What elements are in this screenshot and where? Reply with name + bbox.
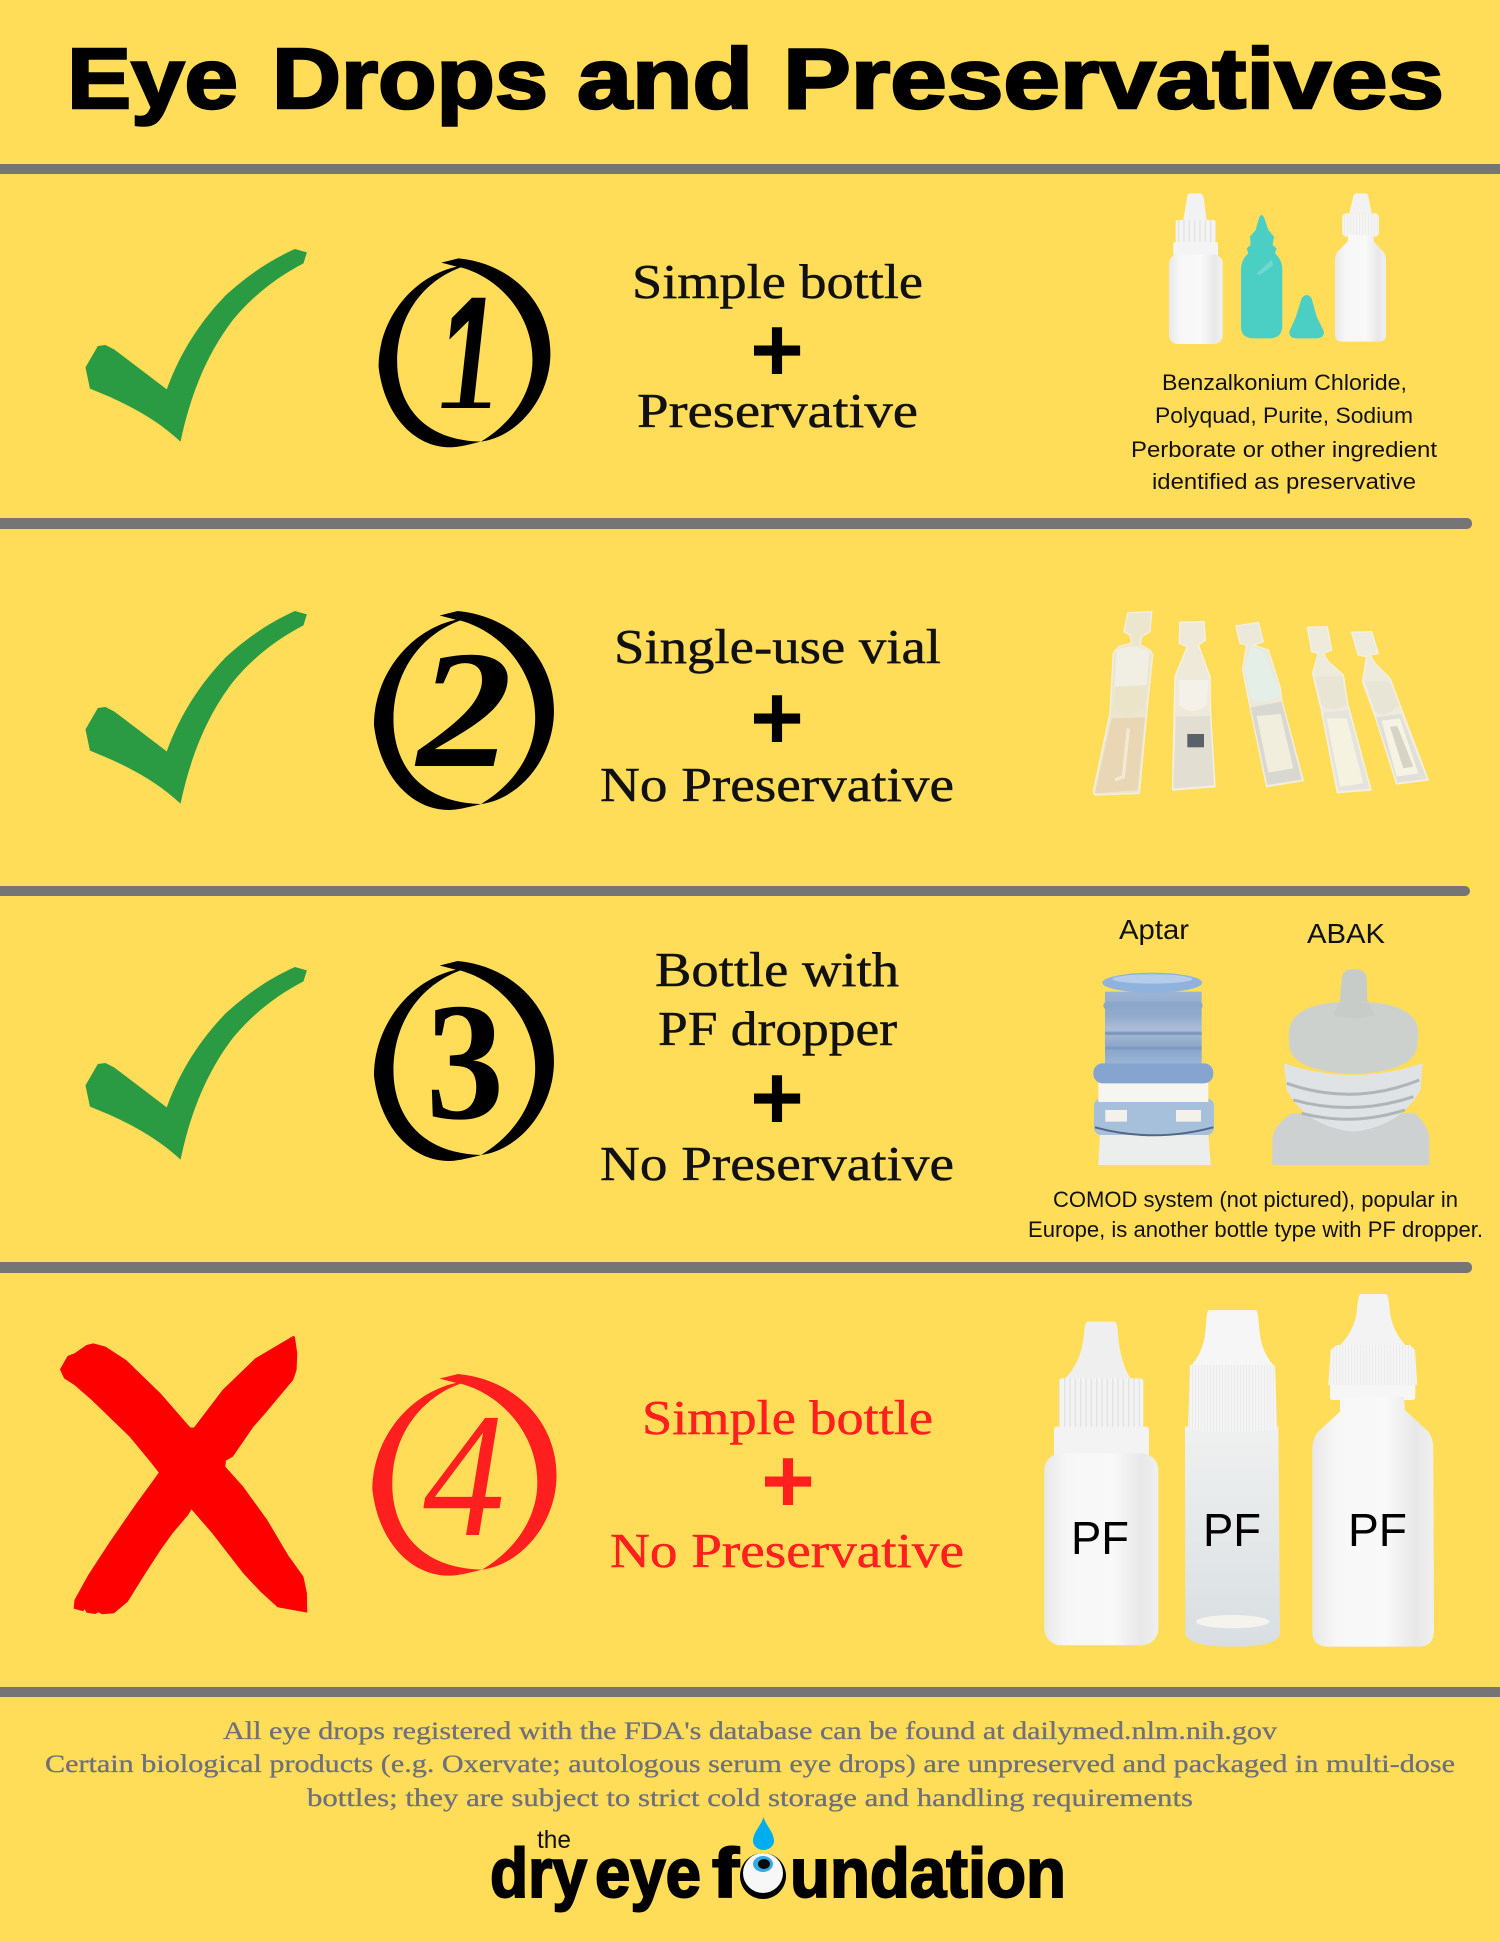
text block: simple bottle plus preservative: Simple bottle	[632, 254, 923, 309]
image: three dropper bottles	[1169, 193, 1386, 344]
text block: preservative names	[1131, 370, 1438, 494]
text block: single-use vial plus no preservative: No Preservative	[600, 757, 954, 812]
logo: the dry eye foundation: dry	[490, 1834, 587, 1912]
text block: single-use vial plus no preservative	[600, 619, 954, 812]
logo: the dry eye foundation	[490, 1817, 1066, 1912]
text block: COMOD note: COMOD system (not pictured), popular in	[1053, 1187, 1458, 1212]
icon: green check mark	[85, 967, 307, 1160]
label: Aptar: Aptar	[1119, 914, 1189, 945]
image: three PF bottles	[1044, 1294, 1434, 1647]
logo: the dry eye foundation: f	[712, 1834, 740, 1912]
title: Drops	[272, 32, 548, 127]
icon: numbered circle 4: 4	[423, 1376, 505, 1574]
text block: footer notes: All eye drops registered with the FDA's database can be found at dailymed.nlm.nih.gov	[223, 1718, 1278, 1745]
label: PF on bottle 2: PF	[1203, 1504, 1261, 1556]
text block: bottle with PF dropper plus no preservative: +	[750, 1047, 804, 1149]
icon: numbered circle 4	[372, 1374, 557, 1576]
text block: bottle with PF dropper plus no preservative: PF dropper	[658, 1001, 897, 1056]
text block: COMOD note: Europe, is another bottle type with PF dropper.	[1028, 1217, 1483, 1242]
label: PF on bottle 3: PF	[1348, 1504, 1407, 1556]
text block: simple bottle plus preservative: Preservative	[637, 383, 918, 438]
text block: simple bottle plus no preservative	[610, 1390, 964, 1578]
text block: simple bottle plus no preservative: Simple bottle	[642, 1390, 933, 1445]
icon: numbered circle 3: 3	[426, 969, 504, 1155]
image: ABAK dropper	[1272, 969, 1429, 1165]
title: Eye	[67, 32, 238, 127]
icon: green check mark	[85, 611, 307, 804]
panel: option 4 simple bottle without preservative	[60, 1294, 1434, 1647]
text block: simple bottle plus preservative	[632, 254, 923, 438]
text block: bottle with PF dropper plus no preservative: Bottle with	[655, 942, 899, 997]
icon: numbered circle 1: 1	[438, 258, 496, 462]
label: ABAK: ABAK	[1307, 918, 1385, 949]
text block: simple bottle plus preservative: +	[750, 299, 804, 401]
panel: option 1 simple bottle with preservative	[85, 193, 1438, 494]
logo: the dry eye foundation: undation	[790, 1834, 1066, 1912]
icon: numbered circle 1	[379, 258, 550, 462]
text block: bottle with PF dropper plus no preservative: No Preservative	[600, 1136, 954, 1191]
panel: option 2 single-use vial without preservative	[85, 611, 1428, 812]
text block: COMOD note	[1028, 1187, 1483, 1242]
icon: blue drop	[753, 1817, 774, 1850]
text block: preservative names: Perborate or other ingredient	[1131, 437, 1438, 462]
text block: preservative names: Polyquad, Purite, Sodium	[1155, 403, 1413, 428]
title: and	[577, 32, 753, 127]
logo: the dry eye foundation: eye	[595, 1834, 701, 1912]
image: Aptar dropper	[1093, 973, 1214, 1165]
text block: single-use vial plus no preservative: Single-use vial	[614, 619, 941, 674]
icon: eye in the letter o	[740, 1853, 786, 1899]
text block: bottle with PF dropper plus no preservative	[600, 942, 954, 1191]
icon: red cross	[60, 1336, 307, 1614]
title: Preservatives	[783, 32, 1444, 127]
title	[67, 32, 1444, 127]
text block: footer notes: bottles; they are subject to strict cold storage and handling requirements	[307, 1785, 1193, 1812]
text block: single-use vial plus no preservative: +	[750, 667, 804, 769]
icon: numbered circle 3	[374, 961, 554, 1161]
text block: simple bottle plus no preservative: No Preservative	[610, 1523, 964, 1578]
text block: preservative names: identified as preservative	[1152, 469, 1416, 494]
text block: footer notes	[45, 1718, 1455, 1812]
icon: numbered circle 2	[374, 611, 554, 810]
label: PF on bottle 1: PF	[1071, 1512, 1129, 1564]
text block: preservative names: Benzalkonium Chloride,	[1162, 370, 1407, 395]
image: five single-use vials	[1093, 612, 1428, 795]
icon: numbered circle 2: 2	[414, 617, 512, 803]
panel: option 3 bottle with preservative-free dropper	[85, 914, 1483, 1242]
text block: footer notes: Certain biological products (e.g. Oxervate; autologous serum eye drops) are unpreserved and packaged in multi-dose	[45, 1751, 1455, 1778]
text block: simple bottle plus no preservative: +	[761, 1430, 815, 1532]
icon: green check mark	[85, 249, 307, 442]
logo: the dry eye foundation: the	[537, 1826, 571, 1854]
